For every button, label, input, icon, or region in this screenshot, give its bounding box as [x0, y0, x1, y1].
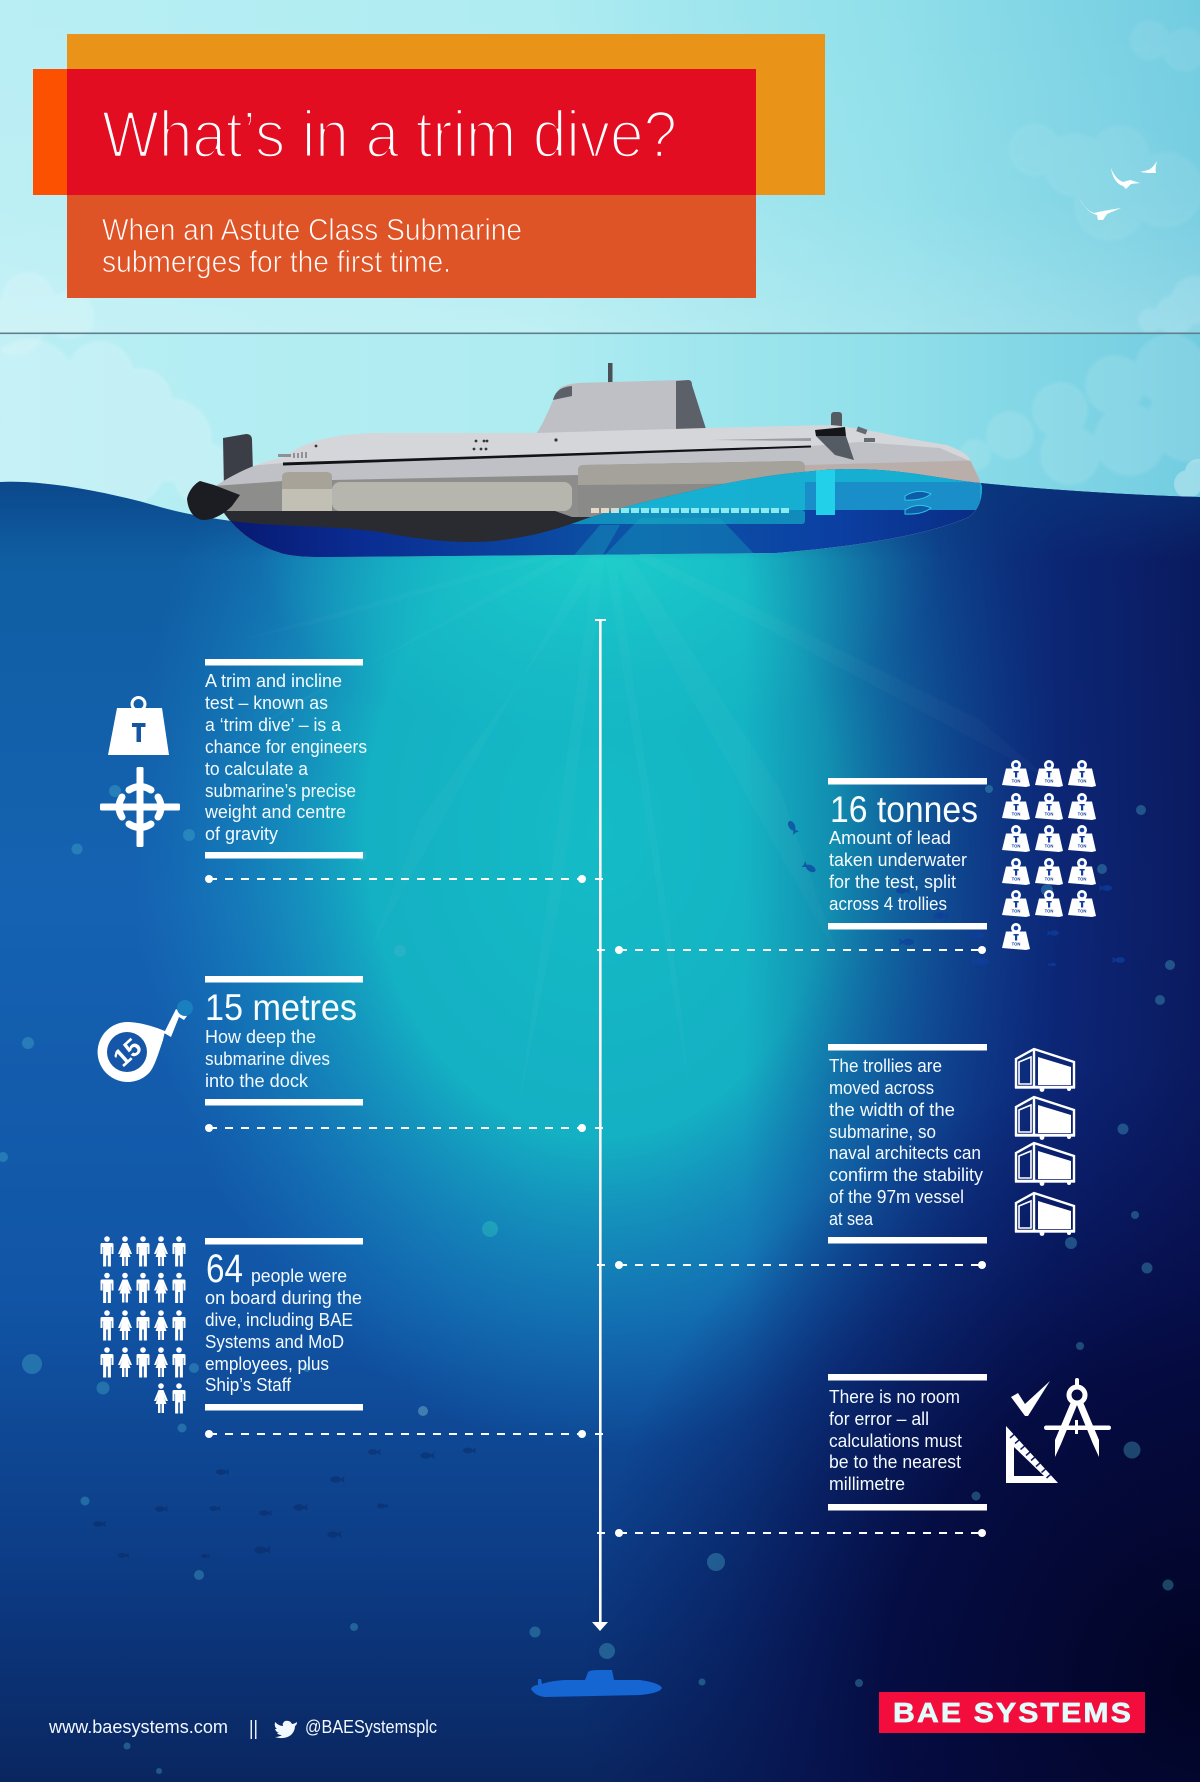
text block — [204, 670, 367, 844]
red block — [67, 69, 756, 195]
dashed connector: no room for error — [615, 1529, 986, 1537]
propeller — [187, 481, 240, 520]
subtitle: submerges for the first time. — [102, 244, 451, 279]
icon: twitter bird — [275, 1721, 297, 1738]
subtitle block — [67, 195, 756, 298]
text block — [205, 1265, 362, 1395]
icon: sixteen tonne weights — [1002, 760, 1096, 950]
logo: BAE Systems: BAE SYSTEMS — [893, 1697, 1133, 1728]
text block: on board during the — [205, 1287, 362, 1308]
text block: people were — [251, 1265, 347, 1286]
text block: for error – all — [829, 1408, 929, 1429]
heading: 15 metres — [205, 987, 357, 1028]
text block: millimetre — [829, 1473, 905, 1494]
text block: A trim and incline — [205, 670, 342, 691]
hull — [216, 425, 982, 557]
icon: tape measure: 15 — [108, 1033, 147, 1072]
text block: submarine’s precise — [205, 780, 356, 801]
deck dots — [315, 438, 558, 450]
subtitle: When an Astute Class Submarine — [102, 212, 522, 247]
panel: 16 tonnes — [828, 778, 987, 930]
text block — [205, 1026, 330, 1091]
dashed connector: 16 tonnes — [615, 946, 986, 954]
text block: to calculate a — [205, 758, 309, 779]
panel: trim and incline — [204, 659, 367, 858]
dashed connector: trollies — [615, 1261, 986, 1269]
water inside hull — [230, 469, 982, 557]
sky background — [0, 0, 1200, 560]
bow plane — [815, 426, 875, 460]
icon: people grid — [100, 1236, 186, 1414]
text block — [829, 1055, 984, 1229]
title: What’s in a trim dive? — [102, 97, 677, 171]
text block: Systems and MoD — [205, 1331, 344, 1352]
orange block — [67, 34, 825, 195]
text block: across 4 trollies — [829, 893, 947, 914]
central depth line with arrow — [592, 619, 608, 1631]
text block: There is no room — [829, 1386, 960, 1407]
windows row — [591, 508, 789, 513]
clouds: lower right — [959, 334, 1200, 485]
submarine — [187, 363, 1000, 570]
footer: website and twitter: || — [249, 1718, 258, 1740]
footer: website and twitter: www.baesystems.com — [48, 1716, 228, 1737]
clouds: upper left — [0, 272, 94, 355]
panel: no room for error — [828, 1374, 987, 1510]
dashed connector: trim test — [205, 875, 586, 883]
text block: Amount of lead — [829, 827, 951, 848]
heading: 16 tonnes — [830, 789, 978, 830]
footer: website and twitter: @BAESystemsplc — [305, 1716, 437, 1737]
tower fin — [676, 380, 706, 430]
clouds: lower left — [0, 339, 271, 518]
mast — [608, 363, 612, 384]
dashed connector: 15 metres — [205, 1124, 586, 1132]
left accent — [33, 69, 67, 195]
clouds: upper right — [1009, 20, 1200, 241]
cloud: right edge near water — [1174, 459, 1200, 498]
logo: BAE Systems — [879, 1692, 1145, 1733]
text block: weight and centre — [204, 801, 346, 822]
conning tower — [536, 380, 706, 434]
text block: submarine dives — [205, 1048, 330, 1069]
text block: the width of the — [829, 1099, 955, 1120]
panel: 15 metres — [205, 976, 363, 1106]
bow mast — [831, 412, 842, 430]
text block — [829, 1386, 962, 1494]
stern vents — [278, 452, 307, 458]
fish shoal: lower left — [93, 1447, 476, 1558]
panel: 64 people — [205, 1238, 363, 1410]
text block: moved across — [829, 1077, 934, 1098]
dashed connector: 64 people — [205, 1430, 586, 1438]
icon: four trollies — [1015, 1049, 1075, 1236]
text block: dive, including BAE — [205, 1309, 353, 1330]
text block: of the 97m vessel — [829, 1186, 964, 1207]
text block: at sea — [829, 1208, 874, 1229]
text block: employees, plus — [205, 1353, 329, 1374]
text block: naval architects can — [829, 1142, 981, 1163]
text block: test – known as — [205, 692, 328, 713]
text block: for the test, split — [829, 871, 956, 892]
icon: birds — [1079, 161, 1157, 220]
text block: be to the nearest — [829, 1451, 961, 1472]
hull stripe — [283, 446, 811, 466]
number: 64 — [206, 1247, 243, 1291]
text block — [829, 827, 967, 914]
icon: centre of gravity crosshair — [100, 767, 180, 847]
text block: How deep the — [205, 1026, 316, 1047]
panel: trollies — [828, 1044, 987, 1244]
light rays — [200, 555, 1050, 1100]
subtitle — [102, 212, 522, 279]
horizon line — [0, 332, 1200, 334]
icon: small submarine — [531, 1670, 662, 1697]
text block: of gravity — [205, 823, 279, 844]
icon: tick, compass and set square — [1006, 1378, 1111, 1483]
upper highlight — [712, 438, 811, 441]
text block: confirm the stability — [829, 1164, 984, 1185]
icon: tape measure — [98, 1000, 193, 1082]
text block: Ship’s Staff — [205, 1374, 292, 1395]
icon: weight — [108, 698, 169, 755]
text block: calculations must — [829, 1430, 962, 1451]
stern fin — [223, 434, 253, 490]
sea — [0, 482, 1200, 1782]
text block: chance for engineers — [205, 736, 367, 757]
footer: website and twitter — [48, 1716, 437, 1740]
text block: submarine, so — [829, 1121, 936, 1142]
text block: a ‘trim dive’ – is a — [205, 714, 342, 735]
bubbles — [0, 785, 1175, 1774]
text block: The trollies are — [829, 1055, 942, 1076]
text block: into the dock — [205, 1070, 309, 1091]
tower window — [553, 386, 572, 400]
text block: taken underwater — [829, 849, 967, 870]
title panel — [33, 34, 825, 298]
clouds: upper right horizon — [1138, 276, 1200, 335]
fish shoal: right — [786, 819, 1125, 966]
